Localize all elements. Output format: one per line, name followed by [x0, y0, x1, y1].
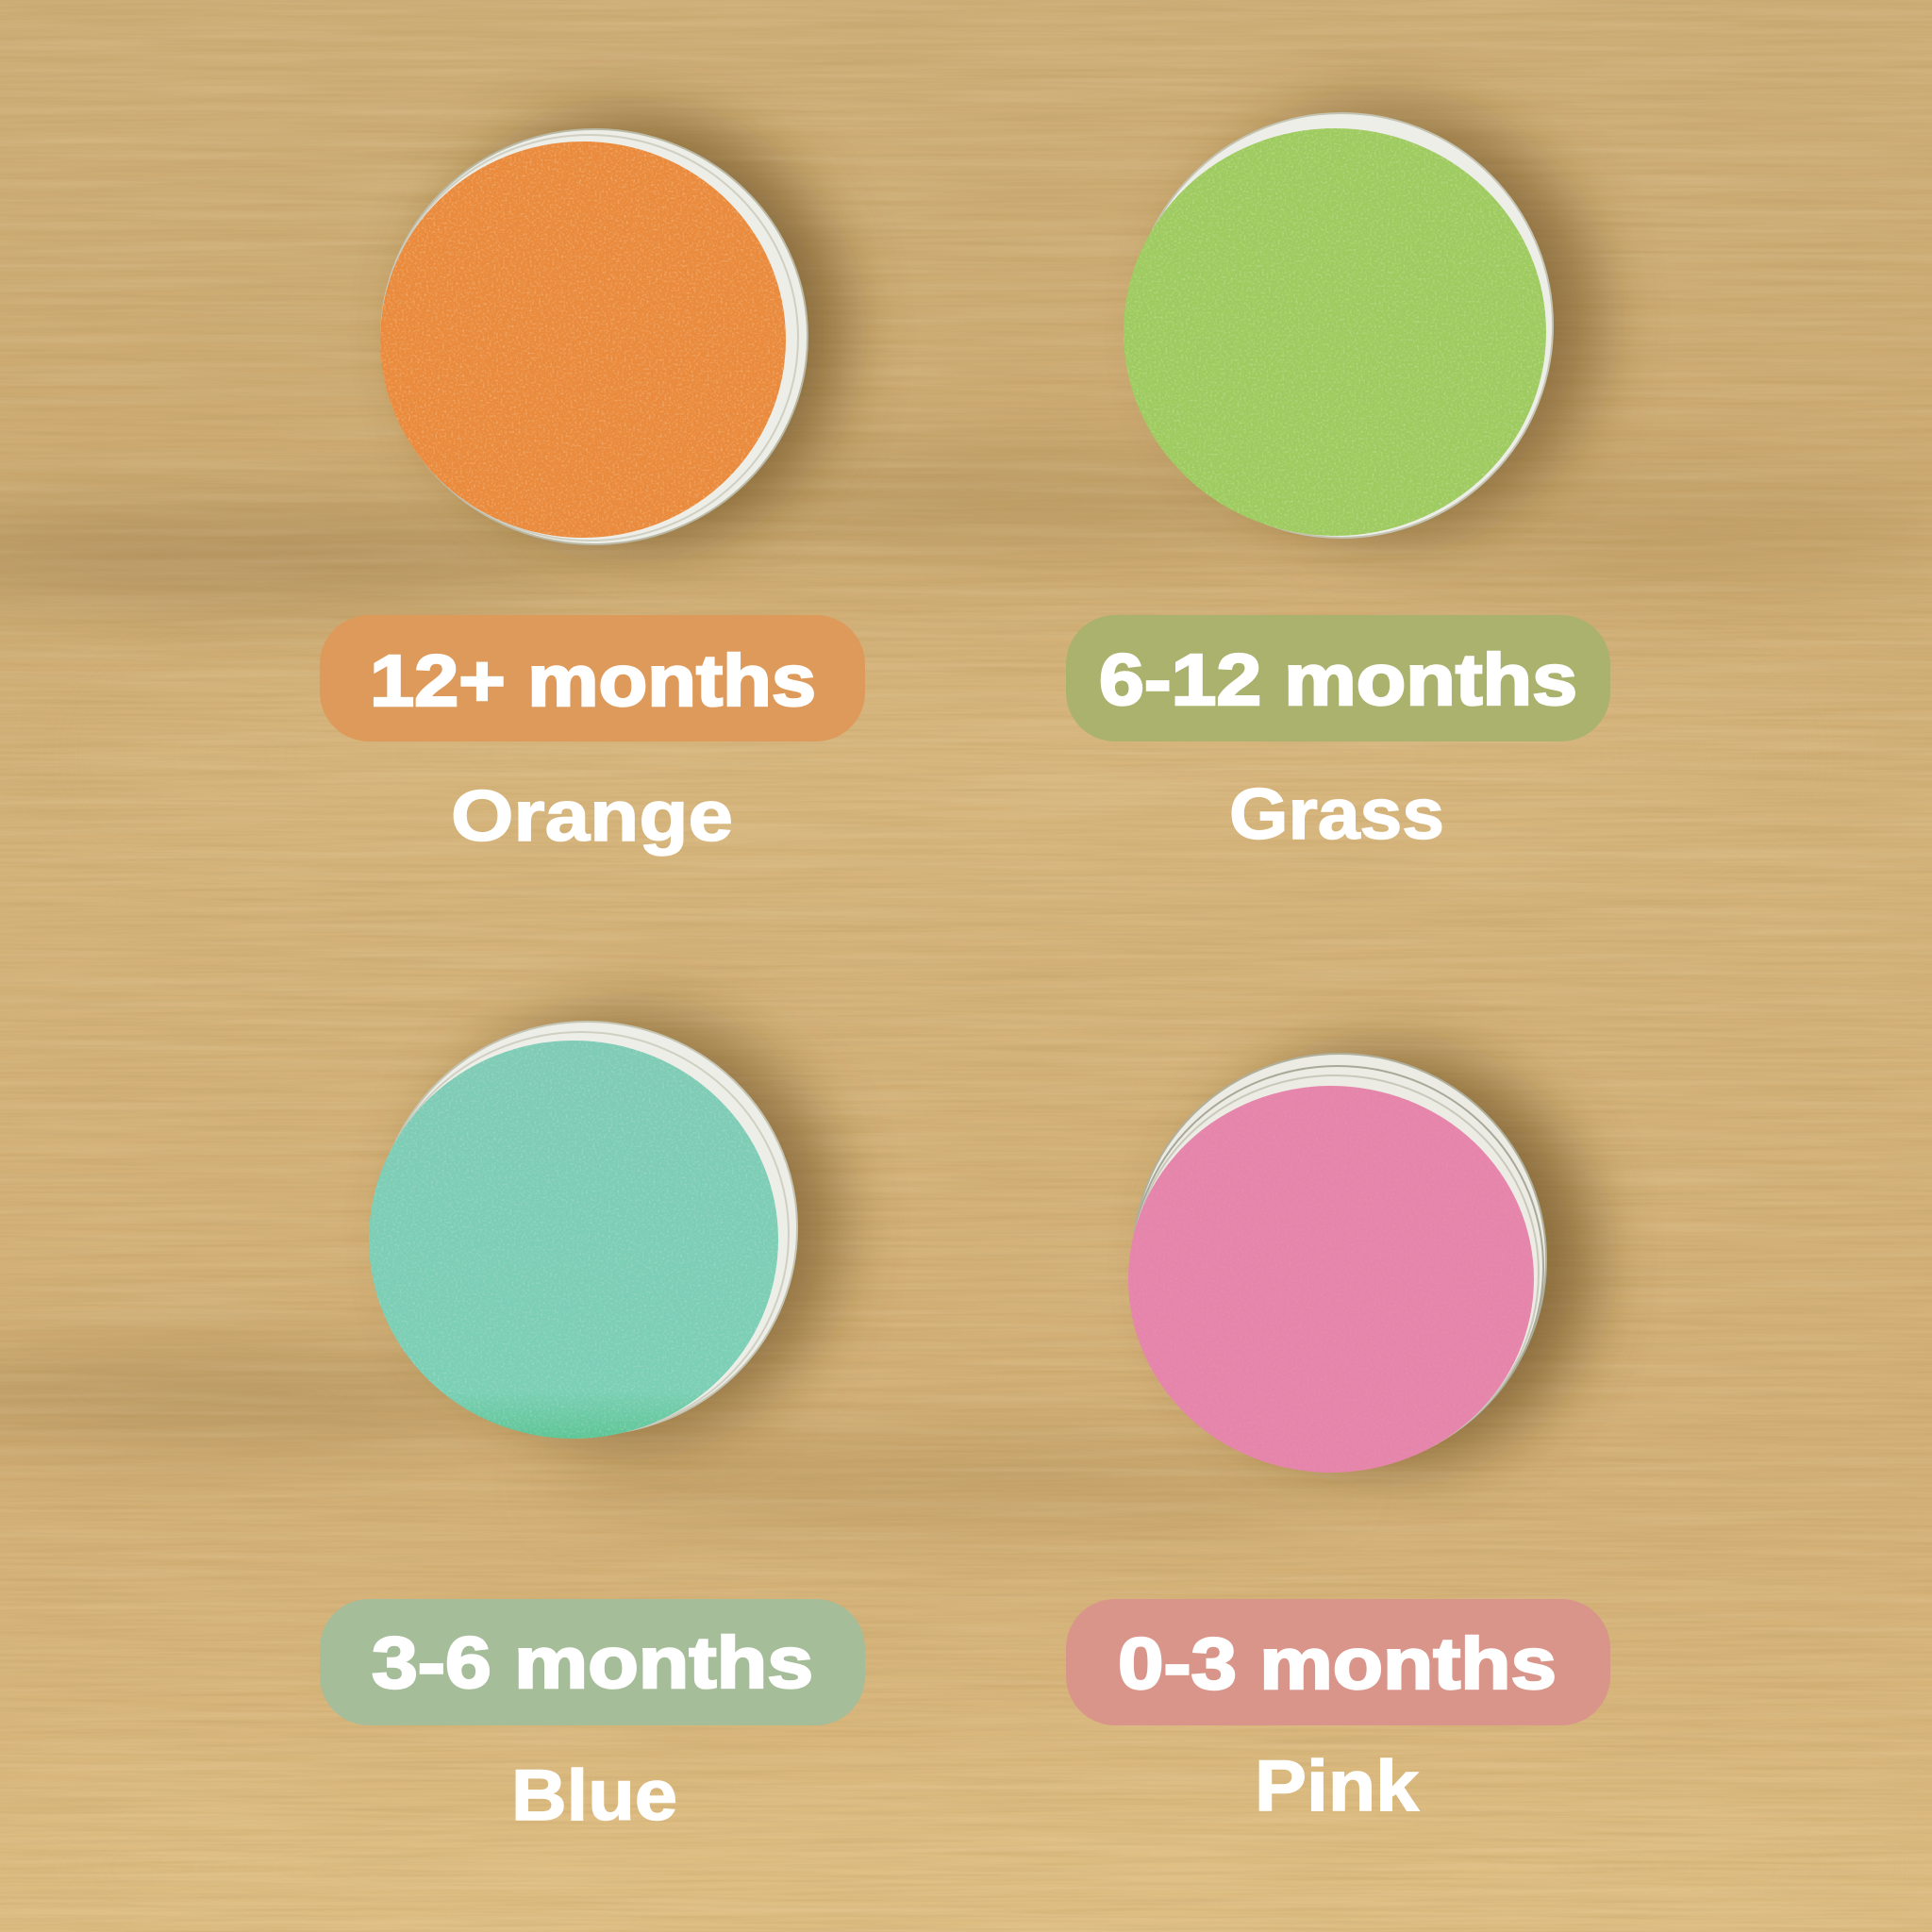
panel: grass disc, 6-12 months	[1066, 108, 1610, 855]
icon: orange disc white backing	[381, 129, 808, 544]
label pill: 3-6 months: 3-6 months	[372, 1623, 813, 1704]
label pill: 0-3 months	[1066, 1599, 1610, 1725]
icon: blue abrasive disc	[369, 1041, 778, 1439]
icon: pink disc white backing	[1131, 1054, 1546, 1470]
colour name: Orange: Orange	[451, 776, 733, 857]
panel: orange disc, 12+ months	[320, 118, 865, 857]
panel: pink disc, 0-3 months	[1066, 1052, 1610, 1826]
label pill: 3-6 months	[320, 1599, 865, 1725]
icon: blue disc shadow	[415, 1014, 840, 1439]
label pill: 0-3 months: 0-3 months	[1118, 1624, 1557, 1705]
icon: pink abrasive disc	[1128, 1086, 1534, 1473]
icon: blue disc white backing	[374, 1022, 797, 1436]
label pill: 6-12 months	[1066, 615, 1610, 741]
label pill: 12+ months: 12+ months	[370, 641, 816, 722]
panel: blue disc, 3-6 months	[320, 1014, 865, 1836]
icon: orange abrasive disc	[380, 142, 786, 538]
colour name: Blue: Blue	[511, 1756, 677, 1836]
colour name: Pink: Pink	[1255, 1746, 1420, 1826]
label pill: 6-12 months: 6-12 months	[1099, 640, 1577, 721]
icon: orange disc shadow	[420, 118, 844, 542]
icon: grass disc shadow	[1174, 108, 1599, 533]
icon: pink disc shadow	[1179, 1052, 1594, 1467]
icon: grass abrasive disc	[1124, 128, 1546, 536]
icon: grass disc white backing	[1130, 113, 1553, 538]
colour name: Grass: Grass	[1229, 774, 1444, 855]
label pill: 12+ months	[320, 615, 865, 741]
